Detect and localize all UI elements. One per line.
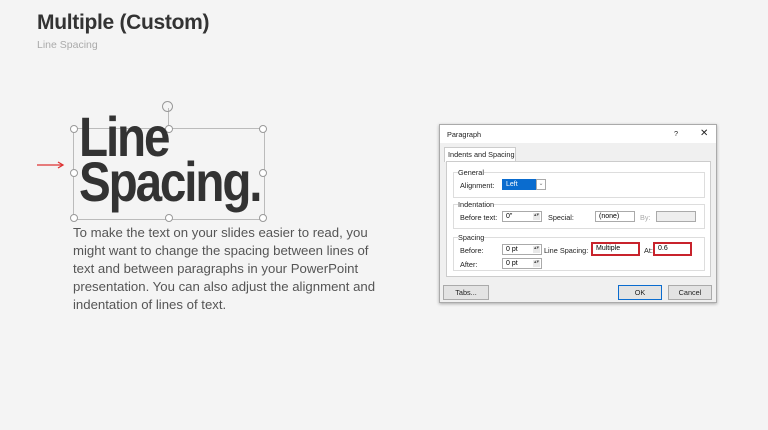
dialog: Paragraph: ▴▾ [534,259,539,265]
heading: Line Spacing. [79,105,260,213]
heading: Line Spacing.: Spacing. [79,150,260,213]
dialog: Paragraph: ? [674,129,678,138]
body text: To make the text on your slides easier to read, you might want to change the spacing between lines of text and between paragraphs in your PowerPoint presentation. You can also adjust the alignment and indentation of lines of text. [73,225,375,312]
dialog: Paragraph: Indentation [458,200,494,209]
dialog: Paragraph: OK [635,288,645,297]
dialog: Paragraph: ▴▾ [534,245,539,251]
heading: Line Spacing.: Line [79,105,168,168]
dialog: Paragraph: Spacing [458,233,484,242]
tab [444,147,516,162]
dialog: Paragraph: By: [640,213,651,222]
dialog: Paragraph: After: [460,260,477,269]
selected text box: Line Spacing [70,101,267,222]
dialog: Paragraph: General [458,168,484,177]
dialog: Paragraph: Before: [460,246,484,255]
dialog: Paragraph: 0.6 [658,245,668,252]
dialog: Paragraph: ✕ [700,128,708,139]
dialog: Paragraph: Line Spacing: [544,246,588,255]
dialog: Paragraph: Before text: [460,213,497,222]
dialog: Paragraph: Left [506,181,518,188]
title: Multiple (Custom) [37,11,209,34]
dialog: Paragraph: ⌄ [538,181,544,187]
arrow: red pointer [37,162,64,168]
buttons [443,285,489,300]
dialog: Paragraph: Special: [548,213,574,222]
dialog: Paragraph: Paragraph [447,130,481,139]
dialog: Paragraph: At: [644,246,653,255]
dialog: Paragraph: Multiple [596,245,620,252]
dialog: Paragraph: 0" [506,213,512,220]
subtitle: Line Spacing [37,39,98,51]
dialog: Paragraph: (none) [599,213,619,220]
tab: Indents and Spacing [448,150,515,159]
dialog: Paragraph: Alignment: [460,181,494,190]
dialog: Paragraph: 0 pt [506,260,518,267]
dialog: Paragraph: Cancel [679,288,701,297]
dialog: Paragraph [439,124,717,303]
dialog: Paragraph: 0 pt [506,246,518,253]
buttons: Tabs... [455,288,477,297]
dialog: Paragraph: ▴▾ [534,212,539,218]
